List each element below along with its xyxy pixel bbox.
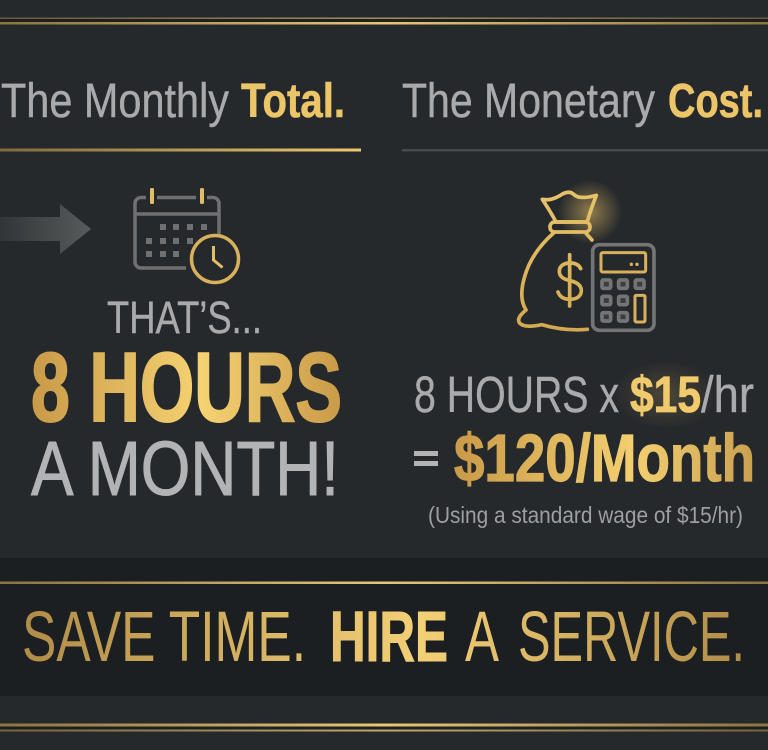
text: a month: A MONTH!	[31, 426, 339, 512]
equation line one	[414, 361, 754, 429]
text: 8 hours: 8 HOURS	[31, 332, 342, 442]
equation line one: $15	[630, 366, 701, 423]
heading: the monthly total: Total.	[241, 75, 345, 128]
heading: the monthly total: The Monthly	[1, 75, 229, 128]
heading underline: gold	[0, 148, 361, 152]
text: that's: THAT’S...	[107, 292, 262, 343]
footer slogan	[22, 598, 745, 677]
wage note: (Using a standard wage of $15/hr)	[428, 502, 743, 528]
icon: money bag with calculator	[519, 180, 654, 330]
panel: the monetary cost	[402, 75, 768, 528]
footer gold rule	[0, 582, 768, 584]
footer slogan: A	[465, 598, 499, 677]
footer slogan: HIRE	[330, 598, 448, 677]
heading: the monetary cost: The Monetary	[402, 75, 655, 128]
footer banner	[0, 558, 768, 696]
equation line one: /hr	[701, 366, 754, 423]
panel: the monthly total	[0, 75, 361, 512]
equation line one: 8 HOURS x	[414, 366, 619, 423]
top double gold rule	[0, 18, 768, 24]
arrow	[0, 204, 91, 254]
heading underline: grey	[402, 149, 768, 152]
footer slogan: SAVE TIME.	[22, 598, 306, 677]
bottom double gold rule	[0, 724, 768, 732]
icon: calendar with clock	[135, 188, 238, 282]
